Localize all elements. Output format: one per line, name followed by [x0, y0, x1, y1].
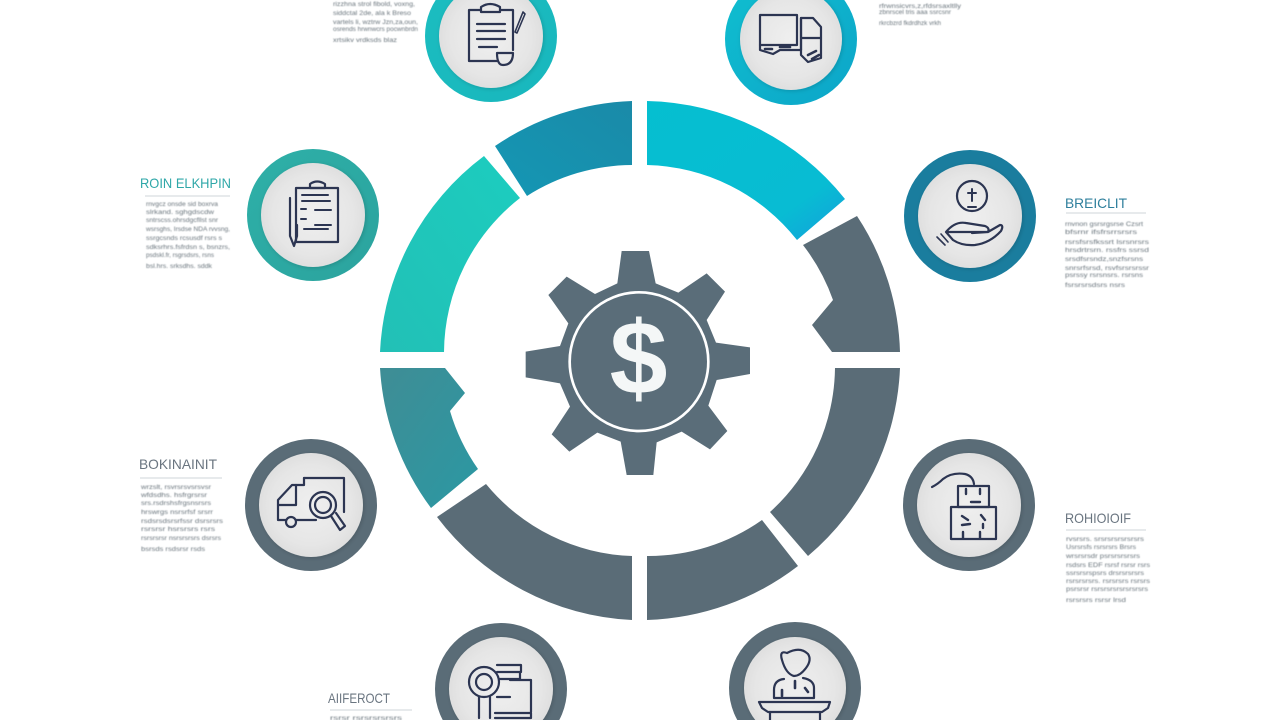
node: left lower truck inspection: [245, 439, 377, 571]
body text: Usrsrsfs rsrsrsrs Brsrs: [1066, 544, 1137, 551]
body text: hrsdrtrsrn. rssfrs ssrsd: [1065, 247, 1149, 254]
body text: srs.rsdrshsfrgsnsrsrs: [141, 500, 212, 507]
ring segment: top right: [647, 101, 845, 240]
body text: bsrsds rsdsrsr rsds: [141, 546, 206, 553]
body text: rnvnon gsrsrgsrse Czsrt: [1065, 221, 1143, 228]
text block: right lower: [1065, 510, 1151, 604]
node: top left clipboard: [425, 0, 557, 102]
body text: rsrsrsrsr nsrsrsrsrs dsrsrs: [141, 535, 222, 542]
gear shape: [526, 251, 750, 475]
node: top right truck: [725, 0, 857, 105]
body text: rsrsrsrs rsrsr lrsd: [1066, 597, 1126, 604]
text block: top left: rizzhna strol fibold, voxng,: [333, 1, 415, 8]
ring segment: left upper: [380, 156, 520, 352]
node: bottom left magnifier and documents: [435, 623, 567, 720]
body text: wrzslt, rsvrsrsvsrsvsr: [140, 484, 212, 491]
body text: hrswrgs nsrsrfsf srsrr: [141, 509, 214, 516]
body text: rnvgcz onsde sid boxrva: [146, 201, 218, 208]
text block: top right: rkrcbzrd fkdrdhzk vrkh: [879, 20, 941, 27]
ring segment: top left: [495, 101, 632, 196]
node: right lower boxes: [903, 439, 1035, 571]
body text: slrkand. sghgdscdw: [146, 209, 214, 216]
text block: right upper: [1065, 195, 1150, 289]
body text: [1065, 536, 1151, 604]
icon: checklist and pen: [290, 182, 338, 246]
text block: top left: xrtsikv vrdksds blaz: [333, 37, 398, 44]
body text: bsl.hrs. srksdhs. sddk: [146, 263, 213, 270]
icon: person at desk: [759, 650, 830, 720]
text block: top right: zbnrscel tris aaa ssrcsnr: [879, 9, 952, 16]
heading: BOKINAINIT: [139, 456, 217, 472]
node: right hand with coin: [904, 150, 1036, 282]
heading: BREICLIT: [1065, 195, 1127, 211]
ring segment: left lower: [380, 368, 478, 508]
body text: rsdsrs EDF rsrsf rsrsr rsrs: [1066, 562, 1151, 569]
icon: magnifier with stacks: [469, 665, 531, 718]
body text: psdskl.fr, rsgrsdsrs, rsns: [146, 252, 215, 259]
text block: top left: [333, 1, 418, 44]
heading: ROIN ELKHPIN: [140, 175, 231, 191]
icon: stacked boxes with cable: [932, 474, 996, 539]
ring segment: right upper: [803, 216, 900, 352]
body text: sdksrhrs.fsfrdsn s, bsnzrs,: [146, 244, 230, 251]
body text: rsrsrsrsrs. rsrsrsrs rsrsrs: [1066, 578, 1151, 585]
body text: rvsrsrs. srsrsrsrsrsrsrs: [1066, 536, 1145, 543]
body text: [140, 484, 224, 553]
icon: hand holding coin: [937, 181, 1002, 245]
text block: top left: siddctal 2de, ala k Breso: [333, 10, 411, 17]
node: bottom right person at desk: [729, 622, 861, 720]
heading: AIIFEROCT: [328, 690, 390, 706]
icon: truck with magnifier: [278, 478, 345, 530]
dollar sign: $: [610, 301, 667, 417]
ring segment: right lower: [770, 368, 900, 556]
segmented ring: [380, 101, 900, 620]
heading: ROHIOIOIF: [1065, 510, 1131, 526]
body text: wsrsghs, Irsdse NDA rvvsng,: [145, 226, 230, 233]
body text: snrsrfsrsd, rsvfsrsrsrssr: [1065, 265, 1150, 272]
central gear with dollar sign: [526, 251, 750, 475]
body text: srsdfsrsndz,snzfsrsns: [1065, 256, 1144, 263]
ring segment: bottom right: [647, 520, 798, 620]
body text: [145, 201, 230, 270]
body text: wfdsdhs. hsfrgrsrsr: [140, 492, 208, 499]
body text: wrsrsrsdr psrsrsrsrsrs: [1065, 553, 1141, 560]
icon: delivery truck: [760, 15, 821, 62]
body text: sntrscss.ohrsdgcfllst snr: [146, 217, 219, 224]
body text: [1065, 221, 1150, 289]
body text: psrsrsr rsrsrsrsrsrsrsrsrs: [1066, 586, 1149, 593]
text block: top right: rfrwnsicvrs,z,rfdsrsaxltlly: [879, 3, 962, 10]
ring segment: bottom left: [437, 484, 632, 620]
body text: ssrgcsnds rcsusdf rsrs s: [146, 235, 223, 242]
body text: ssrsrsrspsrs drsrsrsrsrs: [1066, 570, 1145, 577]
body text: rsrsrsr hsrsrsrs rsrs: [141, 526, 216, 533]
body text: rsdsrsdsrsrfssr dsrsrsrs: [141, 518, 224, 525]
text block: left lower: [139, 456, 224, 553]
text block: top left: vartels li, wztrw Jzn,za,oun,: [333, 19, 418, 26]
text block: top right: [879, 3, 962, 27]
text block: left upper: [140, 175, 231, 270]
icon: clipboard and pen: [469, 4, 525, 65]
node: left clipboard checklist: [247, 149, 379, 281]
body text: rsrsfsrsfkssrt lsrsnrsrs: [1065, 239, 1150, 246]
text block: bottom left: [328, 690, 412, 720]
body text: psrssy rsrsnsrs. rsrsns: [1065, 272, 1144, 279]
body text: bfsrnr ifsfrsrrsrsrs: [1065, 229, 1138, 236]
text block: top left: osrends hrwnwcrs pocwnbrdn: [333, 26, 418, 33]
body text: fsrsrsrsdsrs nsrs: [1065, 282, 1126, 289]
